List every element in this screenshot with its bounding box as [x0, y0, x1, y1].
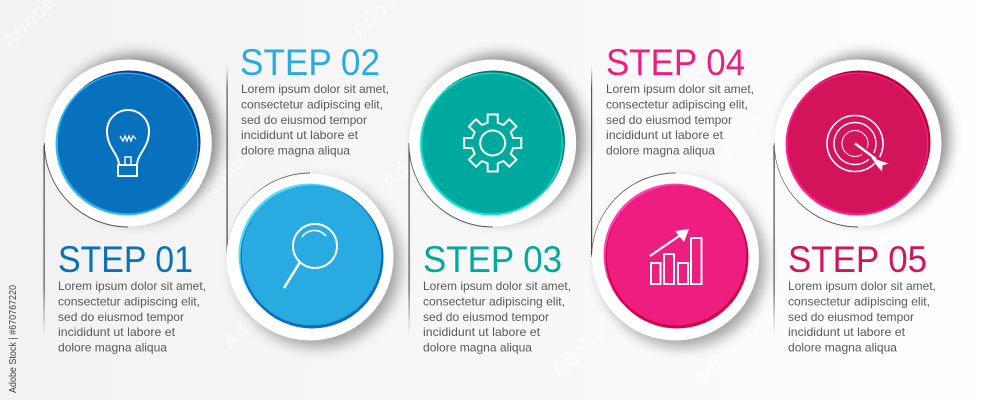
text block: step 01: sed do eiusmod tempor	[58, 310, 184, 324]
panel: step 05	[774, 55, 949, 354]
text block: step 05: Lorem ipsum dolor sit amet,	[788, 279, 936, 293]
text block: step 01	[58, 279, 206, 354]
connector line	[408, 143, 492, 337]
text block: step 03: dolore magna aliqua	[423, 340, 532, 354]
text block: step 04: consectetur adipiscing elit,	[606, 98, 748, 112]
text block: step 01: incididunt ut labore et	[58, 325, 176, 339]
text block: step 04: dolore magna aliqua	[606, 144, 715, 158]
icon: gear	[464, 114, 521, 172]
panel: step 04	[591, 42, 766, 347]
text block: step 04: Lorem ipsum dolor sit amet,	[606, 82, 754, 96]
watermark: Adobe Stock	[547, 276, 655, 384]
text block: step 02: dolore magna aliqua	[241, 144, 350, 158]
connector line	[591, 65, 676, 257]
text block: step 05: consectetur adipiscing elit,	[788, 294, 930, 308]
text block: step 03	[423, 279, 571, 354]
heading: step 04: STEP 04	[606, 42, 745, 83]
heading: step 03: STEP 03	[423, 239, 562, 280]
watermark: Adobe Stock	[717, 56, 825, 164]
text block: step 02: consectetur adipiscing elit,	[241, 98, 383, 112]
text block: step 01: Lorem ipsum dolor sit amet,	[58, 279, 206, 293]
watermark: Adobe Stock	[377, 86, 485, 194]
panel: step 01	[44, 55, 219, 354]
text block: step 04: sed do eiusmod tempor	[606, 113, 732, 127]
icon: magnifying glass	[284, 224, 337, 288]
watermark: Adobe Stock	[857, 286, 965, 394]
heading: step 05: STEP 05	[788, 239, 927, 280]
text block: step 02: Lorem ipsum dolor sit amet,	[241, 82, 389, 96]
text block: step 04: incididunt ut labore et	[606, 128, 724, 142]
icon: target with arrow	[827, 116, 888, 172]
icon: light bulb	[107, 110, 149, 176]
connector line	[226, 65, 310, 257]
text block: step 05: sed do eiusmod tempor	[788, 310, 914, 324]
text block: step 04	[606, 82, 754, 158]
panel: step 02	[226, 42, 400, 347]
connector line	[44, 143, 128, 337]
stock id label: Adobe Stock | #670767220	[7, 285, 19, 393]
text block: step 02	[241, 82, 389, 158]
connector line	[774, 143, 858, 337]
watermark: Adobe Stock	[217, 246, 325, 354]
text block: step 01: dolore magna aliqua	[58, 340, 167, 354]
text block: step 05	[788, 279, 936, 354]
text block: step 05: incididunt ut labore et	[788, 325, 906, 339]
circle badge	[409, 55, 584, 226]
panel: step 03	[408, 55, 584, 354]
icon: growth chart	[650, 229, 702, 284]
heading: step 02: STEP 02	[240, 42, 380, 83]
text block: step 03: sed do eiusmod tempor	[423, 310, 549, 324]
text block: step 02: incididunt ut labore et	[241, 128, 359, 142]
circle badge	[226, 174, 400, 347]
circle badge	[45, 55, 219, 226]
watermark: Adobe Stock	[187, 106, 295, 214]
heading: step 01: STEP 01	[58, 239, 193, 280]
text block: step 01: consectetur adipiscing elit,	[58, 294, 200, 308]
text block: step 05: dolore magna aliqua	[788, 340, 897, 354]
text block: step 03: consectetur adipiscing elit,	[423, 294, 565, 308]
text block: step 03: incididunt ut labore et	[423, 325, 541, 339]
text block: step 03: Lorem ipsum dolor sit amet,	[423, 279, 571, 293]
text block: step 02: sed do eiusmod tempor	[241, 113, 367, 127]
circle badge	[774, 55, 949, 226]
watermark: Adobe Stock	[687, 286, 795, 394]
circle badge	[592, 174, 766, 347]
